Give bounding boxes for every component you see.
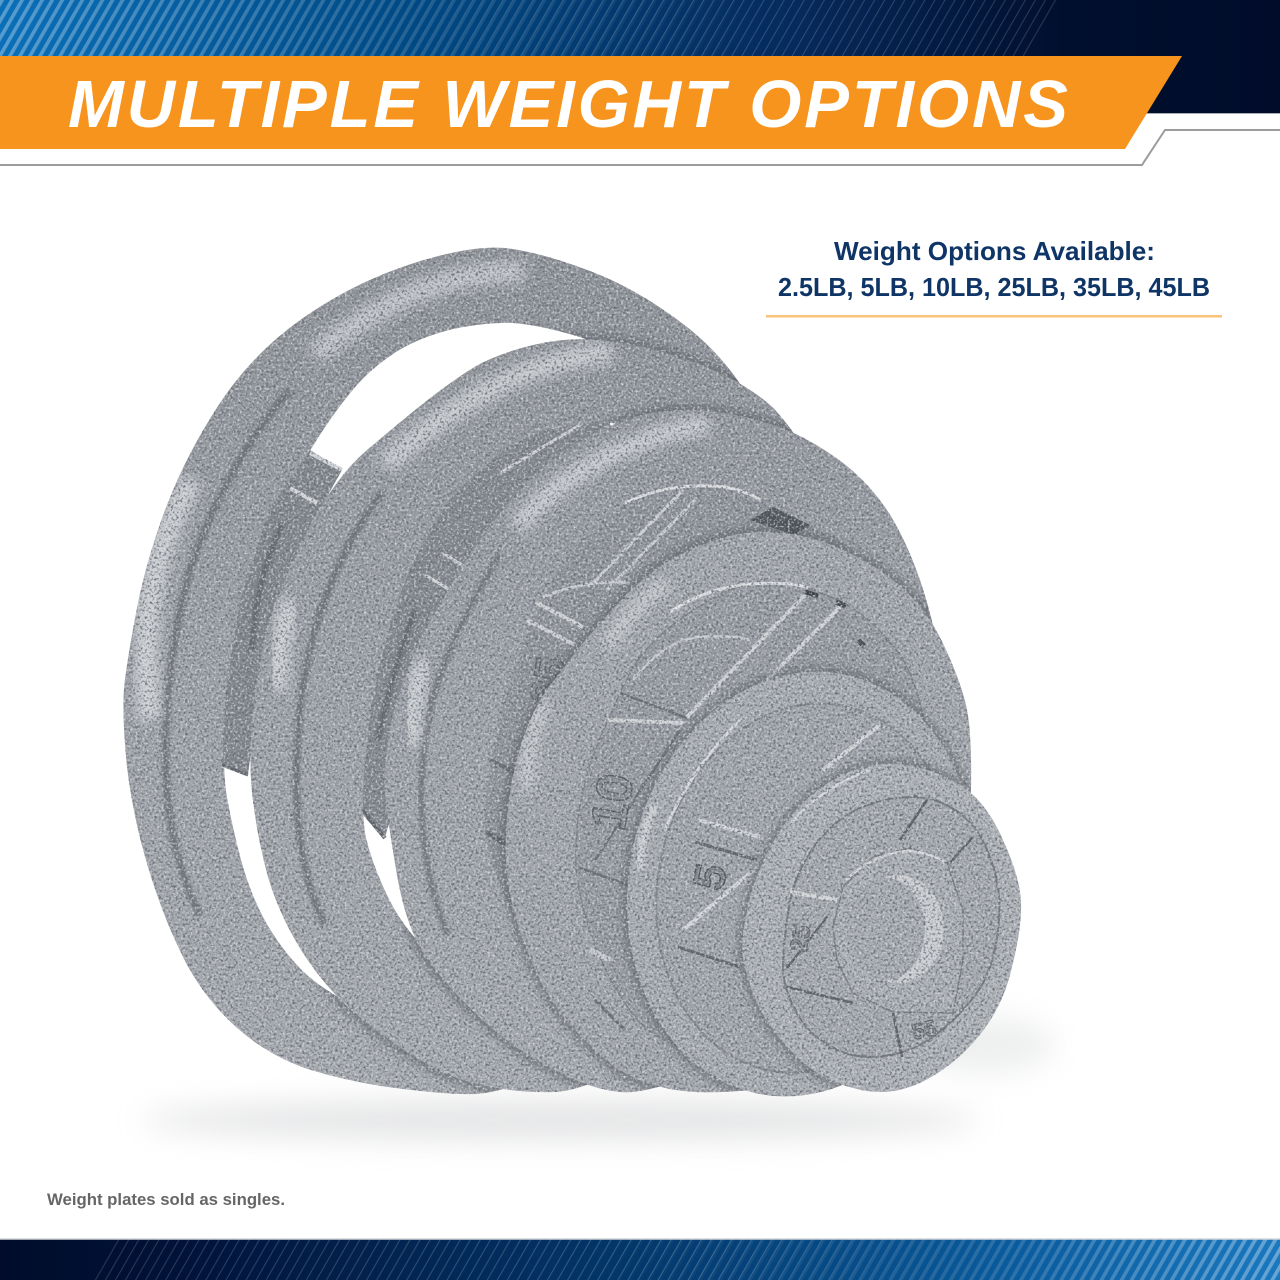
- plate: 2.5 lb: 55: [909, 1015, 939, 1045]
- plate: 45 lb: [123, 248, 796, 1094]
- hub: [833, 848, 963, 1013]
- rim shading: [166, 390, 290, 915]
- header outline stroke: [0, 130, 1280, 165]
- plate: 5 lb: [618, 664, 971, 1096]
- centre hole: [852, 875, 944, 983]
- numeral: 25: [785, 923, 817, 954]
- rear spoke of 35 lb plate: [360, 422, 620, 837]
- title banner: [0, 56, 1182, 149]
- numeral: 35: [521, 653, 575, 708]
- plate: 2.5 lb: [742, 764, 1021, 1092]
- rim shading: [297, 492, 382, 925]
- weight options callout: 2.5LB, 5LB, 10LB, 25LB, 35LB, 45LB: [778, 272, 1210, 302]
- rim shading: [421, 555, 500, 935]
- numeral: 10: [580, 769, 644, 834]
- rim highlight: [527, 583, 667, 790]
- plate: 10 lb: [506, 532, 971, 1092]
- weight options callout: [766, 236, 1222, 318]
- inner web of 10 lb plate: [576, 582, 928, 1055]
- title: MULTIPLE WEIGHT OPTIONS: [68, 67, 1068, 142]
- ground shadow: [140, 1017, 1055, 1140]
- rear spoke of 45 lb plate: [222, 450, 342, 775]
- plate: 25 lb: [385, 410, 944, 1092]
- footnote: Weight plates sold as singles.: [47, 1190, 285, 1209]
- top header band with diagonal stripes: [0, 0, 1280, 114]
- weight options callout: Weight Options Available:: [834, 236, 1155, 266]
- bottom band with diagonal stripes: [0, 1239, 1280, 1280]
- inner web of 25 lb plate: [485, 486, 880, 1020]
- plate: 35 lb: [250, 331, 794, 1094]
- recessed face: [783, 797, 999, 1057]
- numeral: 5: [684, 860, 737, 894]
- weight plates stack: [123, 248, 1021, 1129]
